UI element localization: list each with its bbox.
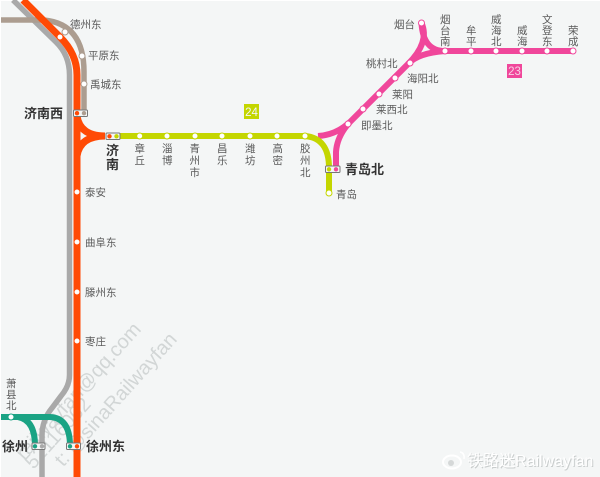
line: teal Xuzhou: [1, 417, 70, 446]
stations: line 24: [134, 133, 311, 179]
weibo watermark: 铁路迷Railwayfan: [467, 452, 593, 470]
watermark: t: @sinaRailwayfan: [51, 329, 182, 471]
stations: pink diagonal: 海阳北: [407, 72, 439, 85]
stations: pink diagonal: 桃村北: [366, 57, 398, 70]
stations: line 24: 密: [272, 154, 284, 167]
station: 青岛: [326, 188, 357, 201]
stations: pink diagonal: 莱西北: [376, 104, 408, 116]
stations: line 24: 乐: [217, 155, 228, 167]
stations: line 24: 胶: [300, 142, 311, 155]
stations: line 24: 淄: [162, 143, 172, 155]
station: 济南: 南: [106, 157, 119, 172]
badge: line 24: 24: [245, 107, 258, 119]
stations: line 24: 青: [190, 142, 200, 155]
stations: pink horizontal: 东: [542, 35, 552, 48]
stations: line 24: 市: [190, 166, 200, 179]
station: 济南西: 济南西: [24, 106, 63, 121]
stations: line 24: 潍: [245, 143, 256, 155]
stations: line 24: 州: [300, 155, 310, 167]
stations: pink diagonal: 莱阳: [392, 89, 413, 101]
station: 济南: 济: [106, 143, 119, 158]
station: 徐州: [2, 439, 45, 454]
station: 济南: [106, 133, 120, 172]
stations: orange trunk: 泰安: [85, 186, 106, 199]
Jinan junction triangle: [77, 116, 105, 156]
station: 萧县北: 县: [6, 389, 16, 401]
stations: pink horizontal: 威: [517, 24, 528, 37]
stations: pink horizontal: 平: [466, 36, 476, 48]
stations: pink diagonal: [345, 57, 439, 132]
station: 青岛北: 青岛北: [345, 162, 384, 177]
stations: pink horizontal: 荣: [568, 25, 579, 37]
stations: orange trunk: 曲阜东: [85, 236, 116, 249]
stations: pink diagonal: 即墨北: [361, 120, 393, 132]
stations: line 24: 高: [272, 142, 283, 155]
stations: pink horizontal: 登: [542, 24, 553, 37]
stations: pink horizontal: 文: [542, 13, 553, 26]
stations: pink horizontal: 牟: [466, 24, 476, 37]
stations: line 24: 昌: [217, 143, 228, 155]
stations: line 24: 丘: [134, 155, 145, 167]
watermark: railwayfan@qq.com: [12, 319, 146, 464]
stations: pink horizontal: 南: [440, 35, 450, 48]
station: 德州东: 德州东: [70, 18, 102, 31]
station: 德州东: [57, 18, 102, 40]
stations: line 24: 坊: [245, 154, 256, 167]
line: orange trunk line: [23, 0, 77, 477]
station: 平原东: 平原东: [88, 49, 120, 62]
stations: pink horizontal: 台: [440, 24, 450, 37]
stations: pink horizontal: 成: [568, 36, 579, 48]
stations: pink horizontal: 威: [491, 13, 502, 26]
watermark: 52116062: [21, 394, 96, 473]
badge: line 24: [244, 104, 259, 119]
station: 烟台: [394, 18, 424, 31]
stations: pink horizontal: 烟: [440, 13, 450, 26]
station: 徐州东: [66, 439, 125, 454]
weibo watermark: 铁路迷Railwayfan: [468, 453, 594, 471]
station: 萧县北: 北: [6, 400, 17, 412]
station: 青岛北: [326, 162, 384, 177]
station: 徐州东: 徐州东: [86, 439, 125, 454]
stations: orange trunk: [74, 186, 116, 348]
stations: line 24: 州: [190, 155, 200, 167]
stations: line 24: 博: [162, 154, 173, 167]
line: grey trunk line: [13, 0, 70, 477]
station: 青岛: 青岛: [336, 188, 357, 201]
station: 禹城东: 禹城东: [90, 78, 122, 91]
line 24: yellow-green: [113, 136, 329, 193]
stations: pink horizontal: 海: [491, 24, 502, 37]
stations: line 24: 章: [134, 142, 145, 155]
station: 徐州: 徐州: [2, 439, 28, 454]
line: taupe branch: [1, 20, 84, 113]
stations: pink horizontal: 北: [491, 36, 502, 48]
line 23: pink: [318, 23, 573, 169]
stations: pink horizontal: 海: [517, 35, 528, 48]
station: 萧县北: [6, 378, 17, 420]
station: 济南西: [24, 106, 88, 121]
stations: line 24: 北: [300, 167, 311, 179]
stations: pink horizontal: [440, 13, 579, 54]
station: 萧县北: 萧: [6, 378, 16, 390]
stations: orange trunk: 滕州东: [85, 286, 116, 299]
badge: line 23: 23: [508, 66, 521, 78]
station: 烟台: 烟台: [394, 18, 415, 31]
stations: orange trunk: 枣庄: [85, 335, 106, 348]
